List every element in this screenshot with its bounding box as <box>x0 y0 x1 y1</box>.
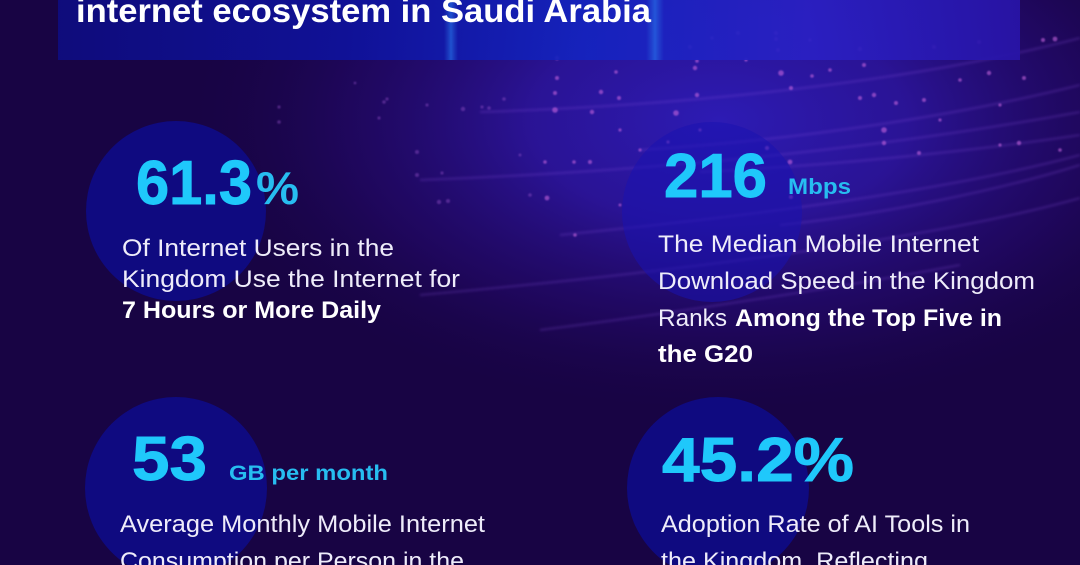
circle highlight <box>622 122 802 302</box>
decorative faint dots on the left <box>277 82 532 204</box>
description: the G20 <box>658 341 753 368</box>
description <box>658 231 1035 368</box>
description <box>122 235 460 324</box>
circle highlight <box>85 397 267 565</box>
description: Average Monthly Mobile Internet <box>120 511 485 538</box>
description: Download Speed in the Kingdom <box>658 268 1035 295</box>
unit: GB per month <box>229 462 388 485</box>
description: 7 Hours or More Daily <box>122 297 381 324</box>
description: The Median Mobile Internet <box>658 231 979 258</box>
circle highlight <box>627 397 809 565</box>
stat: 216 Mbps <box>622 122 1035 368</box>
description: Among the Top Five in <box>735 305 1002 332</box>
description: Ranks <box>658 305 727 332</box>
big number: 45.2% <box>662 426 854 495</box>
description: Of Internet Users in the <box>122 235 394 262</box>
unit: Mbps <box>788 174 851 199</box>
description: Kingdom Use the Internet for <box>122 266 460 293</box>
decorative light streaks <box>420 38 1080 330</box>
stat: 61.3% of internet users <box>86 121 460 324</box>
decorative particle dots <box>543 31 1062 237</box>
stat: 53 GB per month <box>85 397 485 565</box>
big number: 61.3 <box>136 149 252 218</box>
stat: 45.2% AI adoption <box>627 397 970 565</box>
big number: 53 <box>132 425 207 494</box>
percent sign: % <box>256 162 299 214</box>
big number: 216 <box>664 142 767 211</box>
description <box>661 511 970 565</box>
header panel <box>58 0 1020 60</box>
description: Adoption Rate of AI Tools in <box>661 511 970 538</box>
description <box>120 511 485 565</box>
circle highlight <box>86 121 266 301</box>
